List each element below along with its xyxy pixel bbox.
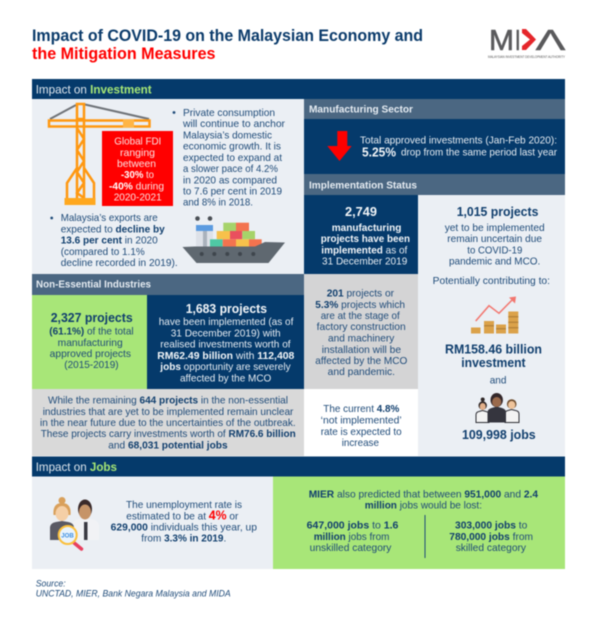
box: construction stage projects: 5.3% projects which	[315, 300, 405, 311]
text block: private consumption: economic growth. It is	[183, 142, 281, 152]
text block: exports: (compared to 1.1%	[61, 247, 145, 258]
text: unemployment rate	[111, 500, 257, 544]
box: 1,683 projects: realised investments worth of	[160, 340, 291, 350]
panel: manufacturing sector	[304, 99, 565, 174]
box: construction stage projects: are at the stage of	[321, 311, 400, 322]
box: not implemented rate: rate is expected to	[321, 427, 402, 438]
box: 1,683 projects	[147, 295, 304, 389]
text: skilled jobs: 780,000 jobs from	[449, 532, 533, 543]
text: unemployment rate: from 3.3% in 2019.	[141, 534, 226, 544]
callout: global FDI: 2020-2021	[114, 192, 162, 204]
box: 1,683 projects: jobs opportunity are severely	[159, 362, 291, 373]
box: uncertain projects: investment	[461, 356, 526, 370]
logo: MIDA	[488, 25, 566, 59]
box: construction stage projects: factory construction	[317, 322, 406, 333]
text: unskilled jobs	[307, 520, 399, 554]
text block: private consumption: expected to expand at	[183, 153, 282, 164]
box: uncertain projects: and	[490, 376, 507, 386]
source note	[36, 578, 231, 600]
icon: job seekers with magnifier: JOB	[61, 532, 74, 540]
text: skilled jobs: skilled category	[456, 543, 527, 554]
text block: private consumption: to 7.6 per cent in 2019	[183, 186, 282, 198]
title: Impact of COVID-19 on the Malaysian Economy and	[32, 26, 423, 45]
box: 2,327 projects: manufacturing	[58, 338, 123, 349]
icon: tower crane	[49, 104, 150, 205]
box: 2,327 projects	[32, 295, 147, 389]
box: not implemented rate: ‘not implemented’	[321, 416, 402, 426]
icon: cargo ship	[182, 216, 285, 263]
text block: private consumption: in 2020 as compared	[183, 176, 277, 186]
box: implemented projects: 31 December 2019	[322, 256, 408, 268]
text block: private consumption: will continue to anchor	[182, 119, 286, 130]
box: uncertain projects: to COVID-19	[467, 246, 523, 256]
text: unemployment rate: 629,000 individuals this year, up	[111, 522, 257, 534]
header: impact on jobs	[32, 456, 565, 476]
text: approved investments: Total approved investments (Jan-Feb 2020):	[360, 136, 557, 146]
text block: private consumption	[173, 108, 286, 209]
icon: rising chart and coins	[471, 296, 518, 334]
text: skilled jobs	[449, 520, 533, 554]
text: skilled jobs: 303,000 jobs to	[455, 520, 528, 532]
box: 1,683 projects: have been implemented (as of	[159, 317, 294, 328]
text: approved investments	[360, 136, 558, 160]
text: approved investments: 5.25%	[362, 146, 396, 160]
callout: global FDI: -40% during	[109, 182, 164, 192]
box: uncertain projects: remain uncertain due	[447, 234, 542, 245]
logo: MIDA: M	[489, 25, 514, 57]
logo: MIDA: Λ	[536, 25, 566, 57]
text block: private consumption: a slower pace of 4.2%	[183, 164, 278, 175]
box: implemented projects: manufacturing	[332, 223, 401, 234]
box: not implemented rate: increase	[342, 438, 379, 449]
box: uncertain projects: pandemic and MCO.	[449, 256, 540, 268]
text: unskilled jobs: million jobs from	[314, 532, 389, 543]
panel: manufacturing sector: Manufacturing Sector	[309, 104, 413, 116]
box: 1,683 projects: 1,683 projects	[186, 302, 267, 316]
box: construction stage projects: and pandemic.	[328, 367, 395, 378]
text block: exports: 13.6 per cent in 2020	[61, 236, 158, 246]
source note: Source:	[36, 578, 66, 590]
box: 1,683 projects: affected by the MCO	[180, 374, 271, 384]
box: 2,327 projects: 2,327 projects	[51, 311, 133, 325]
box: remaining 644 projects	[32, 389, 304, 456]
text: MIER prediction: million jobs would be lost:	[365, 500, 482, 512]
callout: global FDI: between	[117, 159, 156, 170]
box: remaining 644 projects: and 68,031 potential jobs	[108, 440, 228, 452]
header: impact on investment: Impact on Investment	[36, 82, 152, 96]
panel: unemployment	[32, 476, 273, 569]
box: uncertain projects: 1,015 projects	[457, 205, 538, 219]
source note: UNCTAD, MIER, Bank Negara Malaysia and MIDA	[36, 588, 231, 600]
box: uncertain projects	[418, 195, 565, 456]
header: impact on investment	[32, 79, 565, 99]
box: uncertain projects: Potentially contributing to:	[433, 276, 550, 287]
box: implemented projects: 2,749	[345, 205, 377, 219]
title: the Mitigation Measures	[32, 44, 216, 63]
icon: job seekers with magnifier	[50, 497, 99, 549]
box: uncertain projects: RM158.46 billion	[445, 342, 542, 356]
box: uncertain projects: yet to be implemented	[445, 223, 545, 234]
text block: private consumption: Private consumption	[183, 108, 275, 119]
callout: global FDI	[102, 131, 173, 206]
box: remaining 644 projects: While the remaining 644 projects in the non-essential	[48, 396, 288, 406]
icon: red down arrow	[327, 131, 352, 161]
callout: global FDI: Global FDI	[114, 136, 161, 148]
title	[32, 26, 423, 63]
box: remaining 644 projects: in the near future due to the uncertainties of the outbreak.	[40, 418, 296, 429]
text block: private consumption: and 8% in 2018.	[183, 198, 253, 209]
box: construction stage projects	[304, 274, 418, 389]
text block: exports: Malaysia’s exports are	[61, 213, 158, 224]
box: implemented projects: projects have been	[321, 234, 410, 245]
box: implemented projects	[304, 195, 418, 274]
box: construction stage projects: affected by the MCO	[315, 356, 407, 367]
box: construction stage projects: installation will be	[322, 345, 401, 356]
box: 2,327 projects: approved projects	[50, 349, 131, 360]
icon: three people	[476, 393, 519, 422]
text block: exports: decline recorded in 2019).	[61, 258, 178, 269]
panel: MIER job loss prediction	[273, 476, 565, 569]
text: approved investments: drop from the same period last year	[401, 148, 558, 158]
text: MIER prediction	[309, 490, 538, 512]
text: unemployment rate: estimated to be at 4% or	[126, 508, 239, 522]
box: implemented projects: implemented as of	[321, 246, 407, 256]
callout: global FDI: -30% to	[121, 170, 154, 181]
box: 2,327 projects: (2015-2019)	[64, 360, 119, 371]
text: unskilled jobs: unskilled category	[310, 543, 392, 554]
box: remaining 644 projects: industries that are yet to be implemented remain unclear	[43, 407, 294, 418]
panel: implementation status	[304, 174, 565, 456]
logo: MIDA: MALAYSIAN INVESTMENT DEVELOPMENT AUTHORITY	[488, 55, 565, 59]
box: 1,683 projects: RM62.49 billion with 112,408	[157, 351, 295, 362]
text block: exports: expected to decline by	[61, 224, 165, 236]
box: uncertain projects: 109,998 jobs	[462, 428, 536, 442]
text: MIER prediction: MIER also predicted that between 951,000 and 2.4	[309, 490, 538, 500]
box: remaining 644 projects: These projects carry investments worth of RM76.6 billion	[41, 429, 296, 440]
text: unskilled jobs: 647,000 jobs to 1.6	[307, 520, 399, 532]
box: construction stage projects: and machinery	[328, 334, 395, 344]
text block: private consumption: Malaysia’s domestic	[183, 130, 272, 142]
box: 1,683 projects: 31 December 2019) with	[171, 328, 281, 340]
box: not implemented rate	[304, 389, 418, 456]
panel: non-essential industries: Non-Essential Industries	[36, 278, 151, 290]
panel: non-essential industries	[32, 274, 304, 456]
box: construction stage projects: 201 projects or	[327, 288, 395, 300]
panel: implementation status: Implementation Status	[309, 180, 417, 192]
callout: global FDI: ranging	[120, 148, 155, 159]
box: not implemented rate: The current 4.8%	[323, 404, 399, 415]
header: impact on jobs: Impact on Jobs	[36, 460, 117, 474]
logo: MIDA: I	[515, 25, 520, 57]
panel: investment outlook	[32, 99, 304, 274]
text block: exports	[50, 213, 178, 269]
text: unemployment rate: The unemployment rate is	[126, 500, 242, 511]
box: 2,327 projects: (61.1%) of the total	[49, 326, 134, 338]
